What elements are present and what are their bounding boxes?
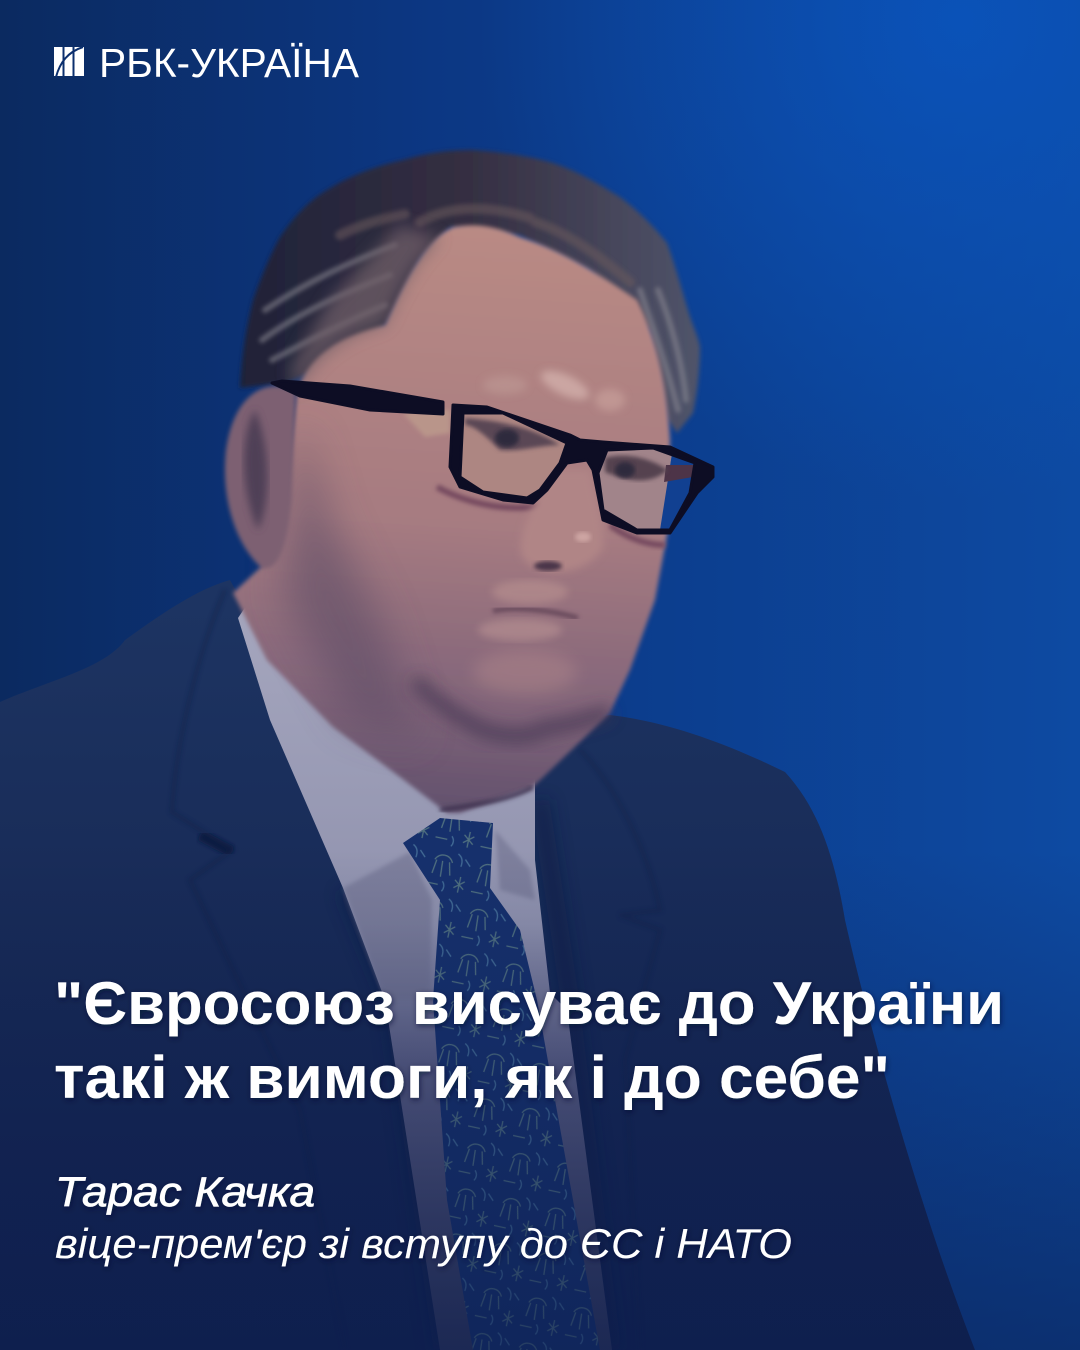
speaker name: Тарас Качка xyxy=(55,1168,315,1215)
speaker role: віце-прем'єр зі вступу до ЄС і НАТО xyxy=(55,1220,792,1267)
forehead highlights xyxy=(483,365,625,411)
ear xyxy=(225,386,296,568)
lens shadows on cheek xyxy=(437,487,665,545)
lenses xyxy=(460,413,567,498)
temple reflection xyxy=(403,410,450,437)
chin fold xyxy=(415,680,610,736)
collar shadow xyxy=(343,830,535,1000)
shirt xyxy=(238,600,612,1350)
glasses xyxy=(272,381,713,533)
tie xyxy=(403,818,600,1350)
upper lip highlight xyxy=(492,580,568,604)
nose xyxy=(521,470,603,572)
quote headline: такі ж вимоги, як і до себе" xyxy=(54,1044,890,1111)
lower lip and chin highlight xyxy=(473,650,577,694)
logo text: РБК-УКРАЇНА xyxy=(99,40,360,86)
jacket folds xyxy=(172,590,660,1350)
quote headline xyxy=(54,970,1004,1111)
suit jacket xyxy=(0,580,975,1350)
attribution xyxy=(55,1168,792,1267)
logo mark xyxy=(54,47,84,77)
nostril xyxy=(534,561,562,571)
face xyxy=(233,225,670,813)
bottom shade xyxy=(0,850,1080,1350)
logo xyxy=(54,40,360,86)
quote headline: "Євросоюз висуває до України xyxy=(54,970,1004,1037)
hair xyxy=(240,150,700,433)
hair strands xyxy=(262,209,686,410)
eyes xyxy=(465,418,560,450)
hairline transition xyxy=(290,225,440,392)
neck crease xyxy=(440,787,533,810)
mouth xyxy=(493,609,578,618)
left cheek shading xyxy=(285,420,420,740)
